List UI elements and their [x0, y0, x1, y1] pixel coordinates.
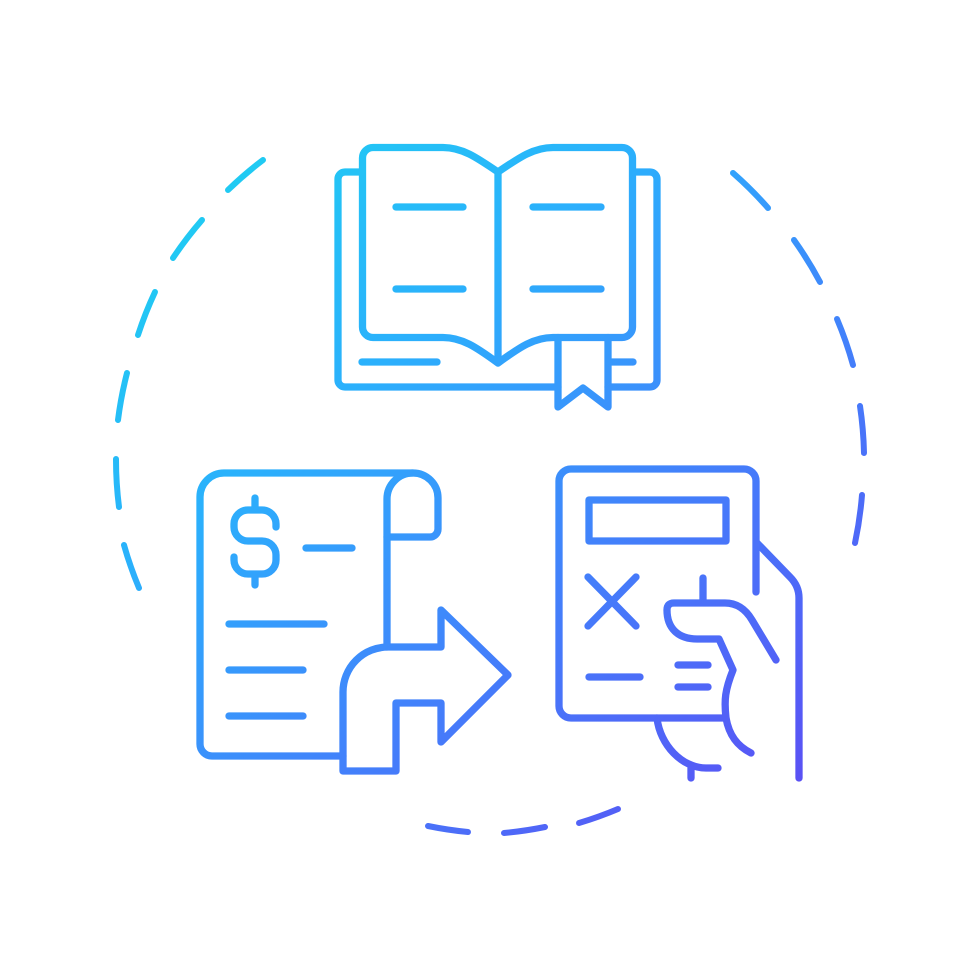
receipt outline	[200, 473, 438, 756]
calculator dashes	[589, 665, 708, 687]
palm	[657, 718, 718, 778]
calculator screen	[589, 500, 726, 541]
book text lines	[362, 207, 633, 362]
icon: calculator held in hand	[559, 469, 799, 778]
book pages	[362, 148, 632, 363]
book back cover	[338, 172, 657, 387]
dollar sign	[234, 498, 276, 585]
icon: open book with bookmark	[338, 148, 657, 407]
multiply sign	[588, 577, 636, 626]
dashed circle ring	[116, 160, 864, 833]
fingers	[667, 578, 776, 753]
bookmark	[558, 338, 608, 407]
receipt text lines	[229, 548, 352, 716]
back of hand	[757, 543, 799, 778]
receipt curl	[387, 473, 413, 647]
arrow	[343, 610, 508, 771]
icon: invoice receipt with arrow	[200, 473, 508, 771]
calculator body	[559, 469, 756, 718]
